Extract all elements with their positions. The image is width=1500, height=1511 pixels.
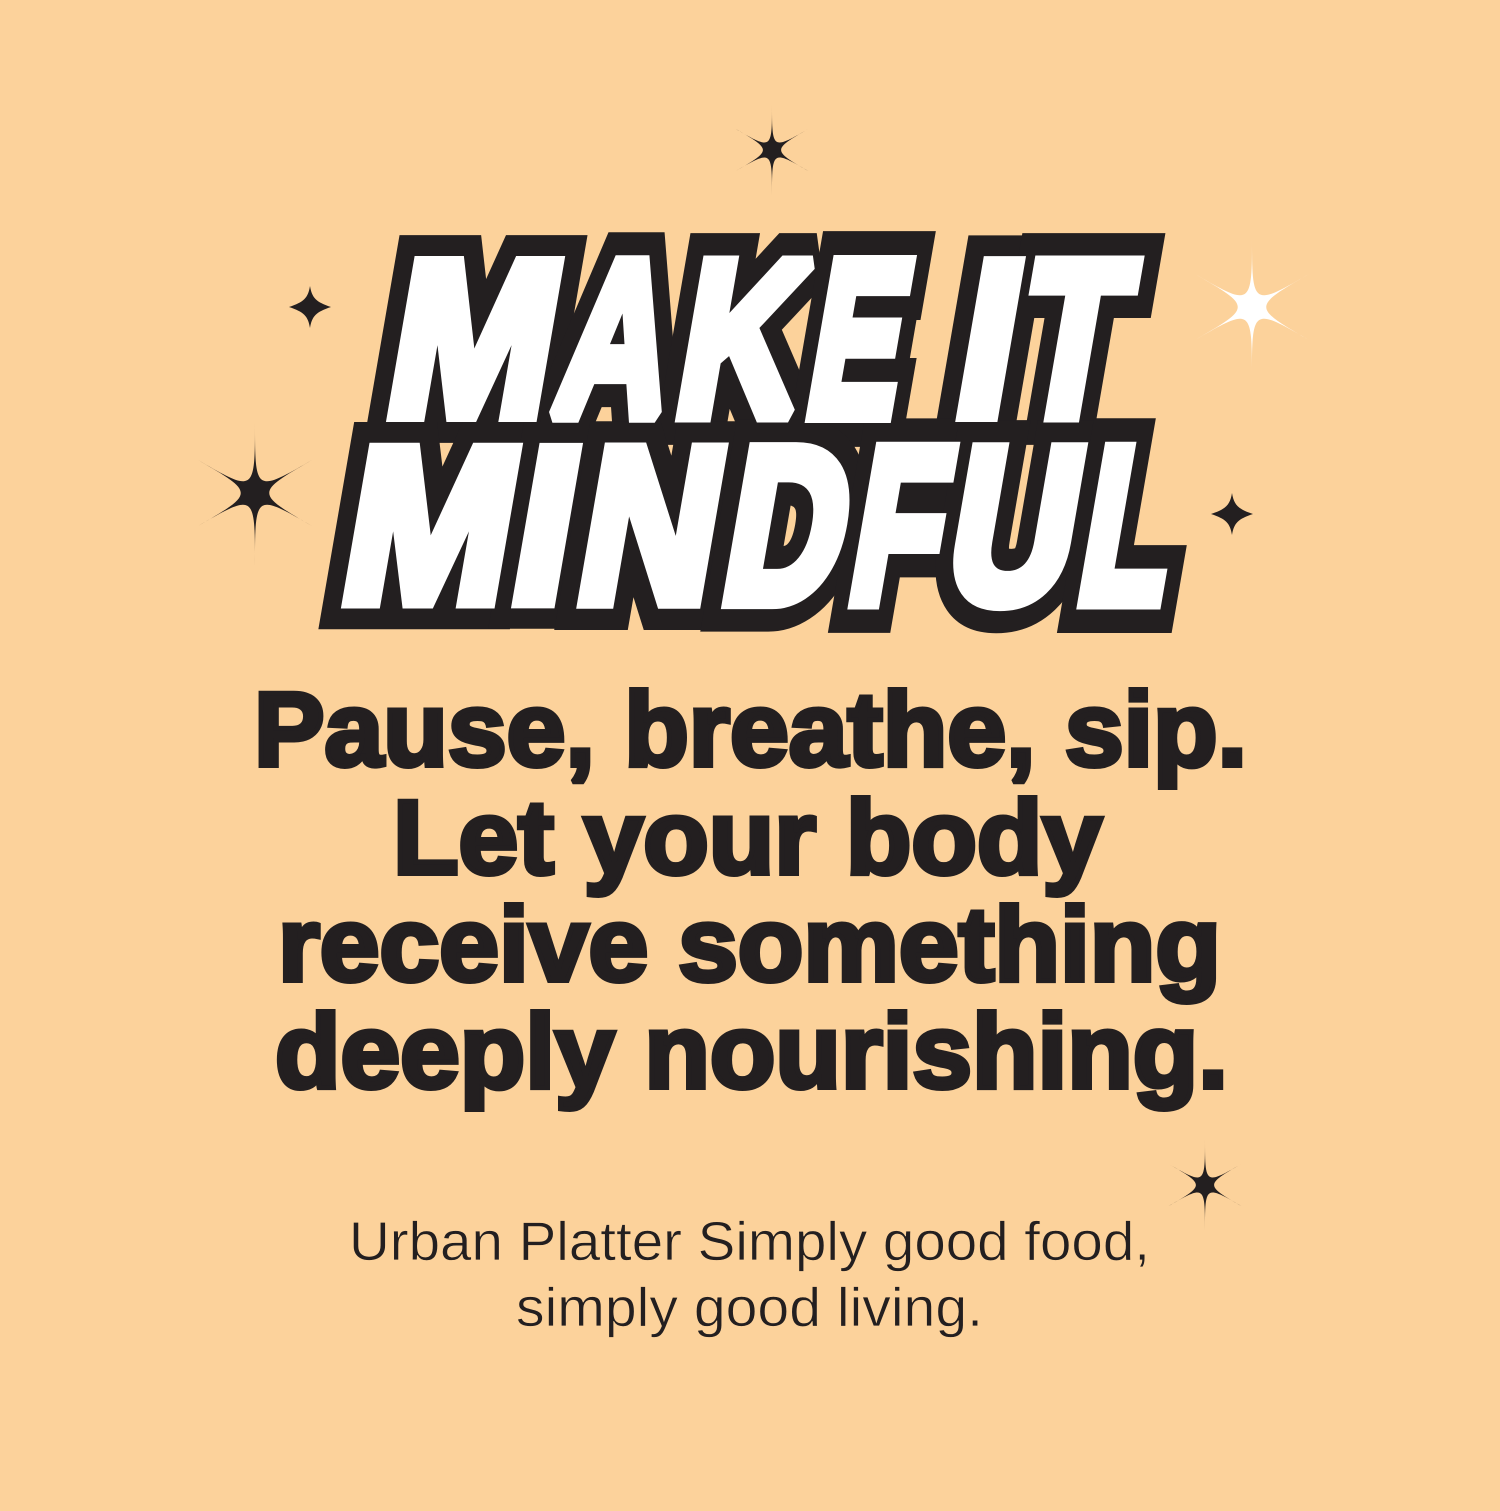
title dark outline: M bbox=[372, 216, 579, 462]
title white letters: U bbox=[933, 403, 1100, 649]
title white letters bbox=[327, 215, 1195, 649]
title dark outline: D bbox=[709, 403, 869, 649]
title dark outline: E bbox=[794, 217, 927, 462]
icon: top sparkle bbox=[736, 104, 808, 196]
title white letters: E bbox=[794, 217, 927, 462]
title white letters: F bbox=[836, 403, 967, 648]
heading text block: receive something bbox=[278, 886, 1221, 1004]
title dark outline: U bbox=[933, 403, 1100, 649]
title white letters: M bbox=[372, 216, 579, 462]
title dark outline: A bbox=[542, 216, 694, 462]
title white letters: L bbox=[1065, 402, 1195, 648]
title: make it mindful bbox=[327, 215, 1195, 649]
icon: small left sparkle bbox=[289, 286, 331, 328]
tagline text block: Urban Platter Simply good food, bbox=[349, 1210, 1150, 1272]
tagline text block: simply good living. bbox=[516, 1276, 983, 1338]
title white letters: A bbox=[542, 216, 694, 462]
title dark outline: I bbox=[941, 217, 1040, 462]
title white letters: D bbox=[709, 403, 869, 649]
title white letters: M bbox=[327, 402, 537, 648]
tagline text block bbox=[349, 1210, 1150, 1338]
title dark outline: F bbox=[836, 403, 967, 648]
icon: bottom sparkle bbox=[1169, 1139, 1241, 1231]
icon: small right sparkle bbox=[1211, 493, 1253, 535]
title white letters: K bbox=[663, 216, 825, 462]
title white letters: I bbox=[941, 217, 1040, 462]
heading text block: Let your body bbox=[393, 780, 1102, 896]
title white letters: T bbox=[1004, 215, 1148, 462]
icon: white sparkle bbox=[1195, 235, 1309, 379]
icon: large left sparkle bbox=[198, 421, 312, 565]
title dark outline: N bbox=[563, 402, 742, 648]
heading text block bbox=[254, 672, 1247, 1110]
title white letters: I bbox=[497, 403, 597, 648]
title dark outline: L bbox=[1065, 402, 1195, 648]
heading text block: Pause, breathe, sip. bbox=[254, 672, 1247, 788]
heading text block: deeply nourishing. bbox=[275, 994, 1228, 1110]
title dark outline: M bbox=[327, 402, 537, 648]
title dark outline: T bbox=[1004, 215, 1148, 462]
title dark outline: K bbox=[663, 216, 825, 462]
title dark outline: I bbox=[497, 403, 597, 648]
title dark outline bbox=[327, 215, 1195, 649]
title white letters: N bbox=[563, 402, 742, 648]
